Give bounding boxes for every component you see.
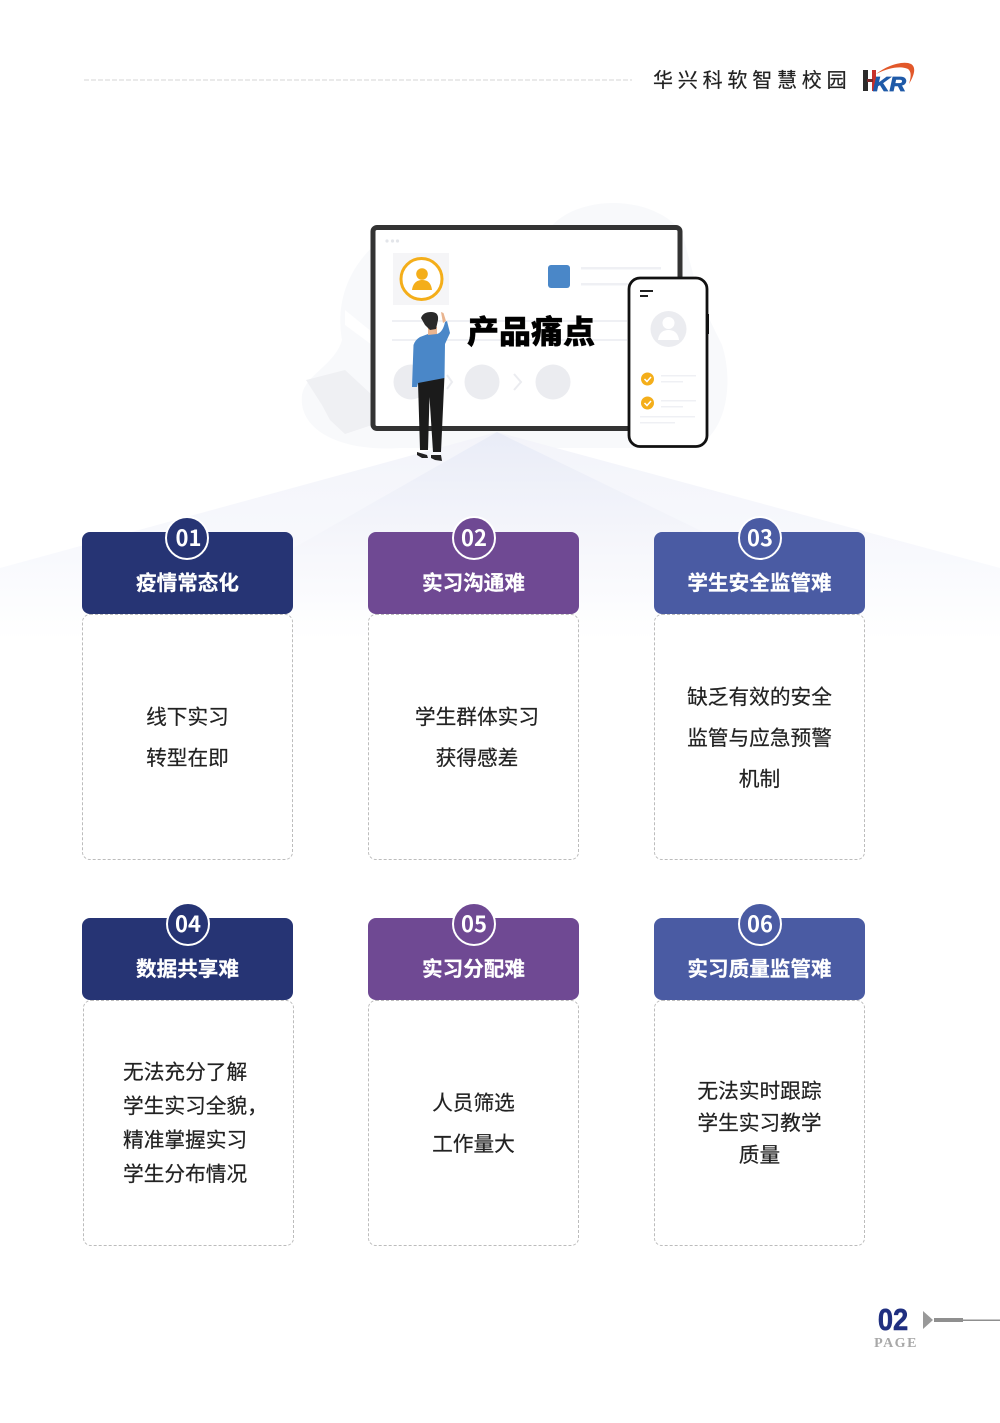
card 03 number bbox=[738, 516, 782, 560]
phone bbox=[629, 278, 709, 446]
card 06 body: 无法实时跟踪 bbox=[697, 1080, 822, 1103]
card 04 header: 数据共享难 bbox=[136, 958, 239, 981]
card 03 header bbox=[654, 532, 865, 614]
card 01 header bbox=[82, 532, 293, 614]
card 03 body: 监管与应急预警 bbox=[687, 726, 832, 750]
background light rays bbox=[139, 432, 858, 558]
card 01 number: 01 bbox=[176, 521, 201, 553]
card 01 body: 转型在即 bbox=[146, 747, 229, 770]
card 02 body bbox=[368, 614, 579, 860]
flow circles bbox=[394, 364, 570, 400]
card 03 body: 机制 bbox=[739, 768, 780, 790]
header rule bbox=[84, 80, 632, 81]
card 01 body: 线下实习 bbox=[146, 706, 229, 729]
card 01 number bbox=[165, 516, 209, 560]
background blob behind illustration bbox=[306, 370, 370, 434]
page number: 02 bbox=[878, 1302, 908, 1337]
card 03 header: 学生安全监管难 bbox=[687, 572, 832, 595]
card 05 header: 实习分配难 bbox=[422, 958, 525, 981]
card 05 number: 05 bbox=[461, 907, 487, 939]
card 04 header bbox=[82, 918, 293, 1000]
icon: HKR logo bbox=[863, 62, 914, 96]
card 04 body bbox=[83, 1000, 294, 1246]
card 01 header: 疫情常态化 bbox=[136, 572, 239, 595]
header brand text: 华兴科软智慧校园 bbox=[653, 70, 851, 92]
card 01 bbox=[82, 516, 293, 860]
card 02 header bbox=[368, 532, 579, 614]
page number: PAGE bbox=[874, 1336, 918, 1351]
main title: 产品痛点 bbox=[467, 314, 595, 350]
card 06 body: 质量 bbox=[739, 1144, 780, 1167]
card 04 bbox=[82, 904, 294, 1246]
card 06 body: 学生实习教学 bbox=[697, 1112, 822, 1135]
card 02 bbox=[368, 516, 579, 860]
card 05 body bbox=[368, 1000, 579, 1246]
card 05 body: 人员筛选 bbox=[432, 1092, 515, 1115]
card 05 header bbox=[368, 918, 579, 1000]
card 03 bbox=[654, 516, 865, 860]
card 04 body: 学生实习全貌， bbox=[123, 1095, 268, 1118]
card 06 header: 实习质量监管难 bbox=[687, 958, 832, 981]
card 02 number bbox=[452, 516, 496, 560]
card 01 body bbox=[82, 614, 293, 860]
card 06 header bbox=[654, 918, 865, 1000]
card 05 bbox=[368, 904, 579, 1246]
card 03 body bbox=[654, 614, 865, 860]
window dots bbox=[385, 239, 399, 243]
card 06 number bbox=[738, 902, 782, 946]
card 06 bbox=[654, 904, 865, 1246]
arrow marker bbox=[923, 1311, 1000, 1329]
card 03 number: 03 bbox=[747, 521, 773, 553]
card 04 number bbox=[166, 902, 210, 946]
card 02 body: 学生群体实习 bbox=[415, 706, 539, 729]
card 06 number: 06 bbox=[747, 907, 773, 939]
person bbox=[412, 312, 450, 461]
card 02 body: 获得感差 bbox=[436, 747, 518, 770]
card 05 body: 工作量大 bbox=[432, 1133, 515, 1156]
page number bbox=[874, 1302, 918, 1351]
card 02 number: 02 bbox=[461, 521, 487, 553]
card 04 body: 无法充分了解 bbox=[123, 1061, 247, 1084]
icon: HKR logo: KR bbox=[873, 74, 907, 96]
card 04 body: 学生分布情况 bbox=[123, 1163, 247, 1186]
card 06 body bbox=[654, 1000, 865, 1246]
avatar bbox=[393, 253, 449, 305]
blue square and lines bbox=[548, 265, 661, 288]
card 02 header: 实习沟通难 bbox=[422, 572, 525, 595]
card 05 number bbox=[452, 902, 496, 946]
content lines bbox=[392, 320, 627, 341]
card 04 number: 04 bbox=[175, 907, 201, 939]
monitor bbox=[373, 228, 680, 428]
card 03 body: 缺乏有效的安全 bbox=[687, 686, 832, 708]
card 04 body: 精准掌握实习 bbox=[123, 1129, 247, 1152]
illustration: product pain points bbox=[370, 225, 709, 461]
